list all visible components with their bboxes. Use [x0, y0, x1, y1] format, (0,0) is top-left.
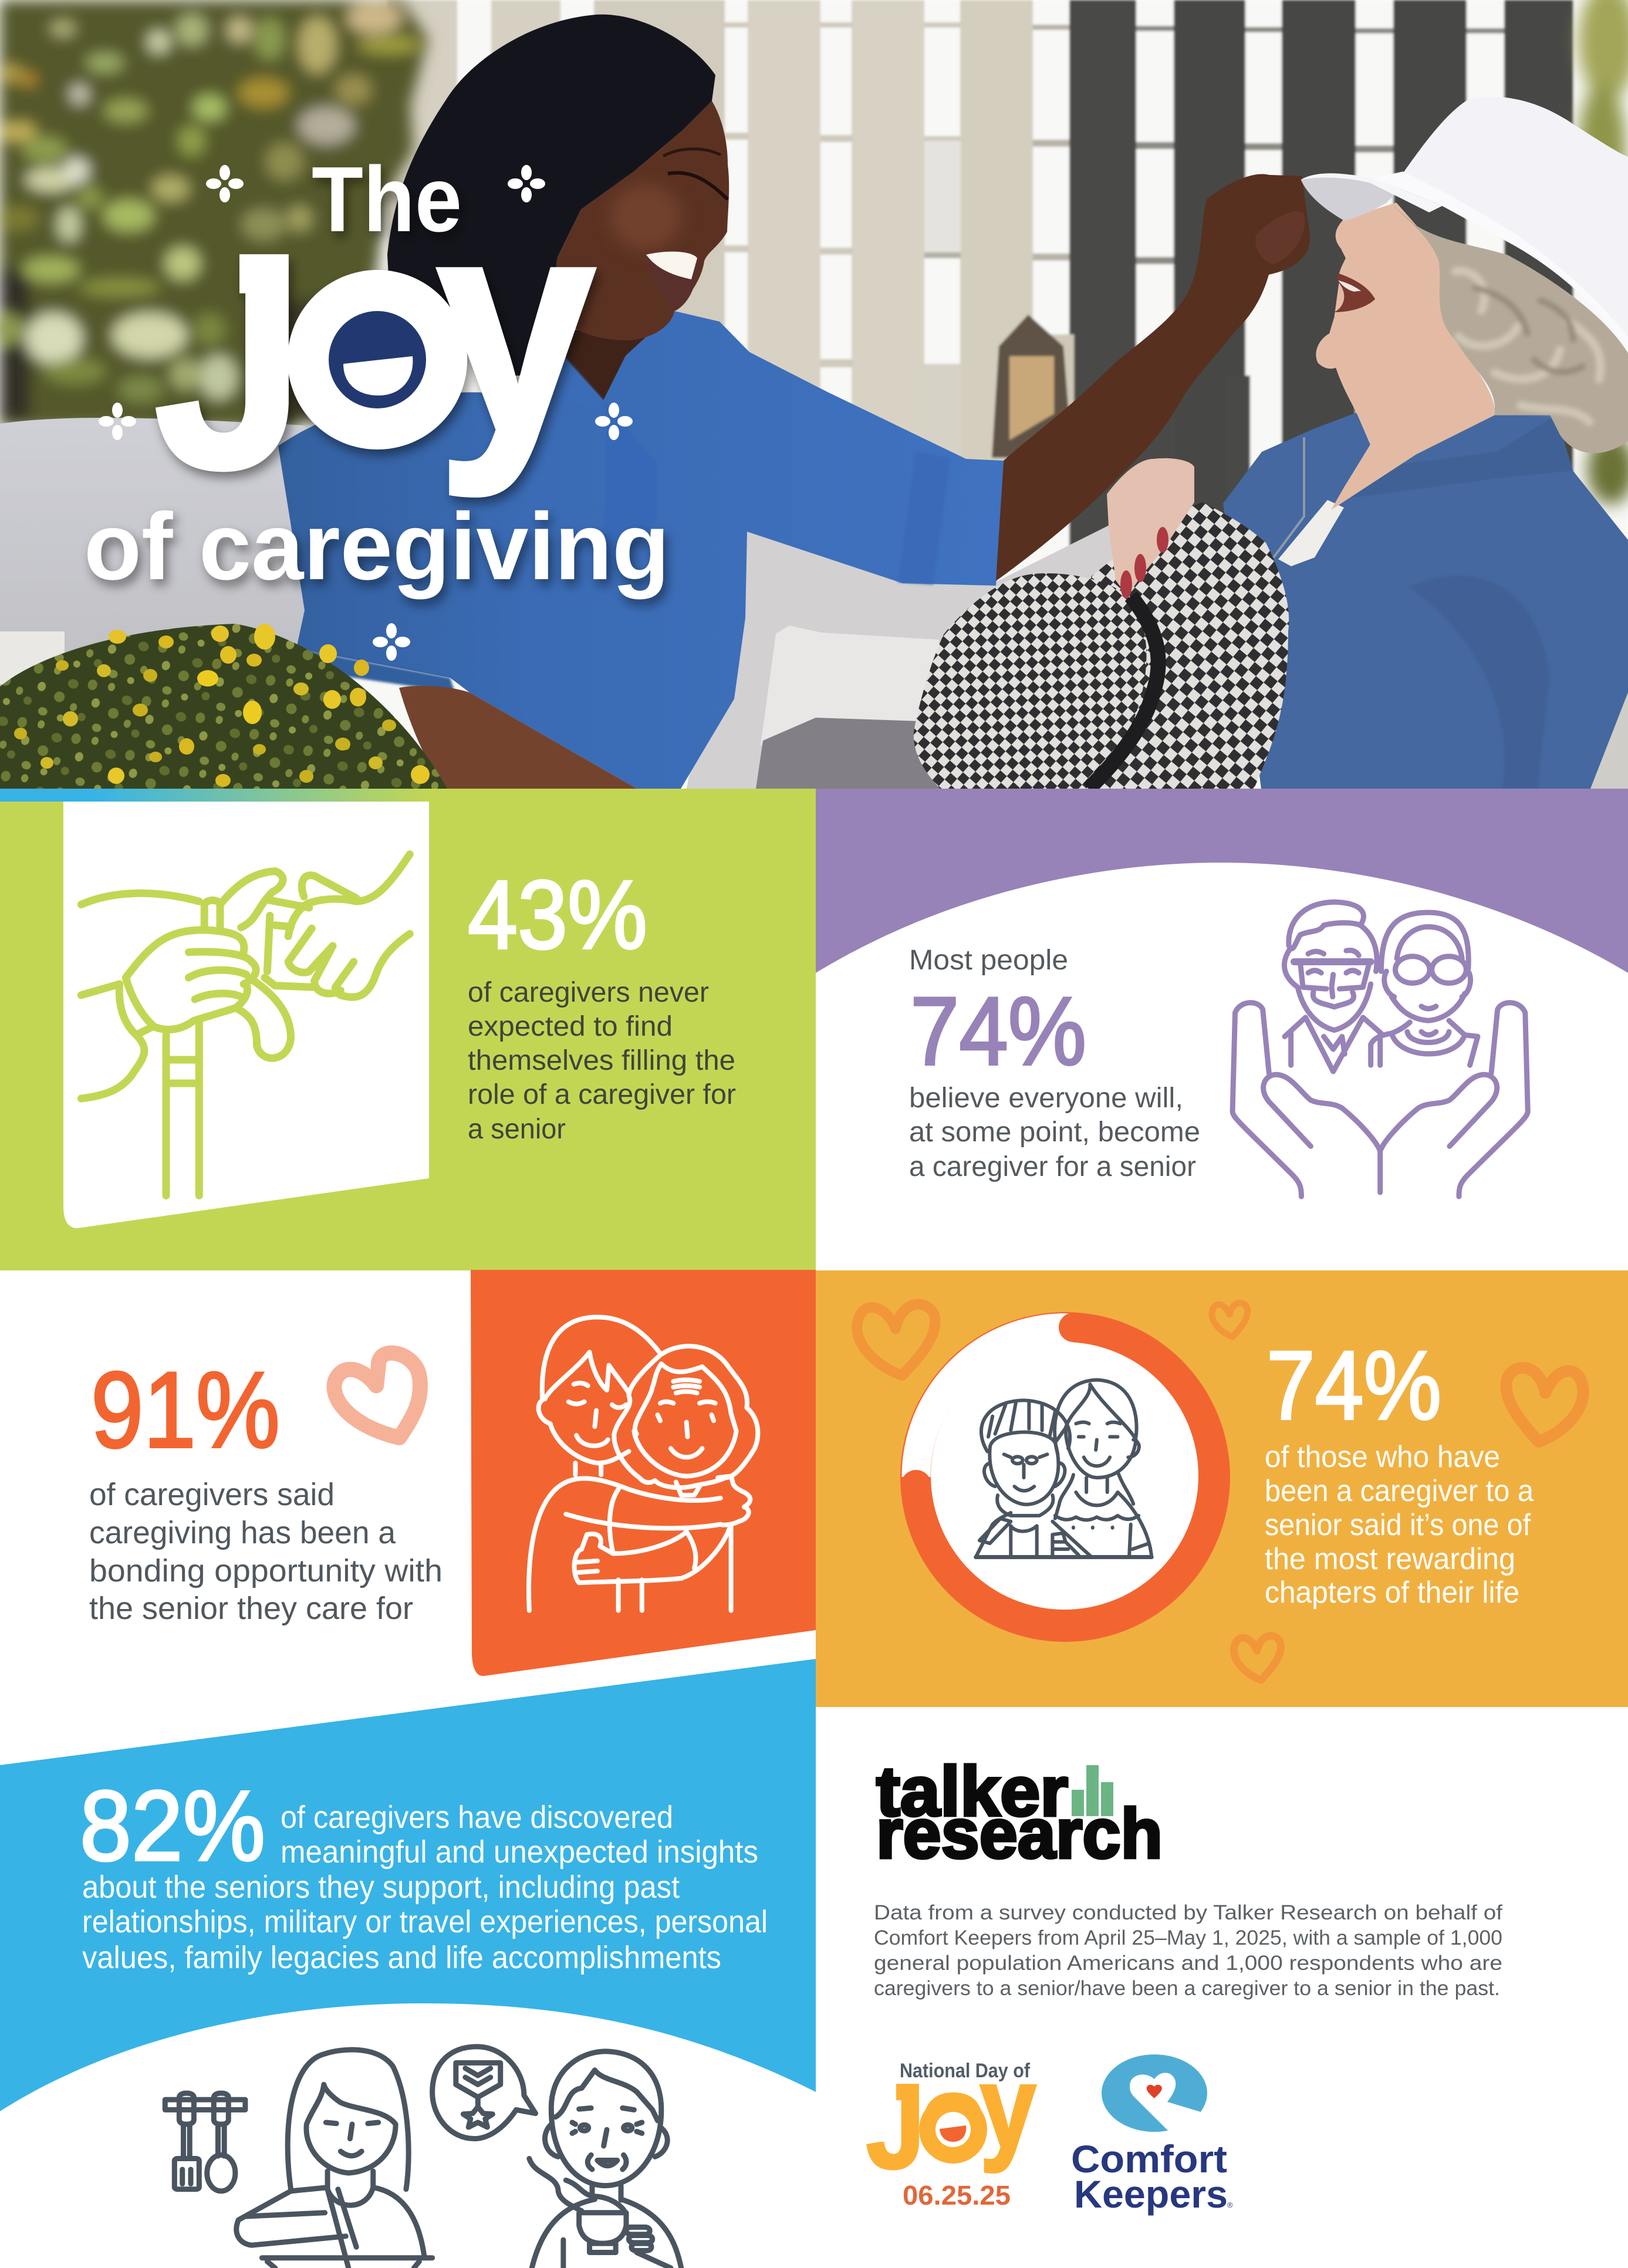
caregiver's face	[556, 101, 729, 340]
caregiver's raised arm and hand	[996, 174, 1310, 581]
icon: hands on a cane	[81, 854, 410, 1195]
logo: National Day of Joy: o	[919, 2052, 987, 2176]
title words: of caregiving: of caregiving	[84, 494, 670, 600]
text: most rewarding chapters: chapters of their life	[1265, 1576, 1519, 1610]
stat: 74%: 74%	[910, 977, 1086, 1085]
title word: Joy: J	[154, 191, 305, 532]
text: survey methodology: Data from a survey conducted by Talker Research on behalf of	[874, 1901, 1502, 1924]
lantern	[992, 315, 1069, 458]
logo: National Day of Joy: y	[980, 2042, 1036, 2173]
text: survey methodology: Comfort Keepers from April 25–May 1, 2025, with a sample of 1,000	[874, 1926, 1502, 1949]
text: believe everyone will: at some point, become	[909, 1117, 1200, 1148]
text: bonding opportunity: the senior they care for	[89, 1591, 413, 1626]
caregiver's hair	[387, 15, 715, 376]
text: caregivers never expected: expected to find	[468, 1011, 673, 1042]
text: caregivers never expected: role of a caregiver for	[468, 1079, 736, 1110]
text: meaningful insights: about the seniors they support, including past	[82, 1870, 680, 1905]
text: most rewarding chapters: been a caregiver to a	[1265, 1474, 1534, 1508]
text: bonding opportunity: of caregivers said	[89, 1477, 335, 1512]
text: caregivers never expected: a senior	[468, 1114, 566, 1145]
logo: National Day of Joy: J	[866, 2060, 925, 2193]
text: survey methodology	[874, 1901, 1502, 2000]
icon: senior couple in cupped hands	[1232, 902, 1528, 1196]
stat: 74%: 74%	[1266, 1331, 1441, 1440]
orange image tile	[471, 1270, 816, 1676]
text: believe everyone will: believe everyone will,	[909, 1083, 1183, 1114]
senior's face, hat and hair	[1301, 97, 1628, 510]
text: most rewarding chapters: the most rewarding	[1265, 1542, 1515, 1576]
yellow flowers plant	[0, 624, 447, 789]
logo: Comfort Keepers: Keepers	[1074, 2172, 1228, 2216]
panel: 43% caregivers never expected	[0, 789, 816, 1270]
senior's jacket	[1223, 411, 1628, 789]
text: survey methodology: caregivers to a senior/have been a caregiver to a senior in the past.	[874, 1977, 1500, 2000]
text: meaningful insights: meaningful and unexpected insights	[281, 1834, 758, 1870]
decorative hearts	[857, 1303, 1583, 1680]
text: caregivers never expected: themselves filling the	[468, 1045, 735, 1076]
logo: Comfort Keepers: ®	[1227, 2201, 1233, 2209]
text: bonding opportunity	[89, 1477, 443, 1626]
text: meaningful insights: values, family legacies and life accomplishments	[82, 1940, 721, 1975]
text: most rewarding chapters: senior said it’s one of	[1265, 1508, 1531, 1542]
logo: National Day of Joy	[866, 2042, 1036, 2210]
shirt folds	[293, 356, 951, 692]
text: believe everyone will: a caregiver for a senior	[909, 1151, 1196, 1182]
title word: The: The	[312, 148, 462, 251]
title word: Joy: y	[437, 156, 596, 498]
text: bonding opportunity: bonding opportunity with	[89, 1553, 443, 1588]
title word: Joy: o	[288, 174, 467, 502]
caregiver's shirt	[278, 311, 1004, 789]
icon: caregiver cooking and senior reminiscing	[165, 2047, 681, 2268]
text: Most people: Most people	[909, 945, 1068, 976]
title: The Joy of caregiving	[84, 148, 670, 600]
stat: 91%: 91%	[91, 1349, 280, 1470]
foliage top right	[1579, 0, 1628, 505]
sparkle decorations	[99, 165, 633, 661]
text: survey methodology: general population Americans and 1,000 respondents who are	[874, 1952, 1502, 1975]
caregiver's neck	[565, 330, 646, 400]
donut chart: 74 percent	[900, 1312, 1230, 1642]
fence background	[354, 0, 1626, 787]
icon: pale heart	[334, 1353, 420, 1438]
panel: 74% most people	[816, 789, 1628, 1270]
sofa	[0, 418, 319, 687]
woven hat in hand	[914, 502, 1289, 789]
logo: National Day of Joy: National Day of	[900, 2060, 1031, 2082]
title word: Joy	[154, 156, 596, 532]
caregiver's lower forearm	[399, 686, 637, 789]
stat: 82%: 82%	[80, 1770, 265, 1882]
icon: two people hugging	[529, 1317, 758, 1611]
cushions	[761, 626, 939, 745]
logo: talker research: talker	[876, 1752, 1068, 1831]
panel: 91% bonding opportunity	[89, 1270, 816, 1676]
text: bonding opportunity: caregiving has been a	[89, 1515, 396, 1550]
foliage left	[0, 0, 428, 428]
text: caregivers never expected: of caregivers never	[468, 977, 709, 1008]
icon: senior and caregiver portrait	[976, 1380, 1151, 1557]
text: believe everyone will	[909, 1083, 1200, 1182]
logo: Comfort Keepers: Comfort	[1071, 2137, 1227, 2181]
text: most rewarding chapters	[1265, 1440, 1534, 1610]
text: meaningful insights	[82, 1800, 768, 1975]
logo: Comfort Keepers	[1071, 2054, 1233, 2216]
text: caregivers never expected	[468, 977, 736, 1145]
logo: talker research: research	[876, 1794, 1163, 1873]
text: meaningful insights: relationships, military or travel experiences, personal	[82, 1904, 768, 1939]
panel: 74% most rewarding chapters	[816, 1270, 1628, 1707]
logo: National Day of Joy: 06.25.25	[903, 2180, 1011, 2210]
hero photo: caregiver and senior laughing	[0, 0, 1628, 789]
senior's hand	[1107, 458, 1194, 596]
text: most rewarding chapters: of those who have	[1265, 1440, 1500, 1474]
panel: 82% meaningful insights	[0, 1659, 816, 2268]
stat: 43%: 43%	[468, 861, 647, 969]
text: meaningful insights: of caregivers have discovered	[281, 1800, 673, 1835]
logo: talker research	[876, 1752, 1163, 1873]
